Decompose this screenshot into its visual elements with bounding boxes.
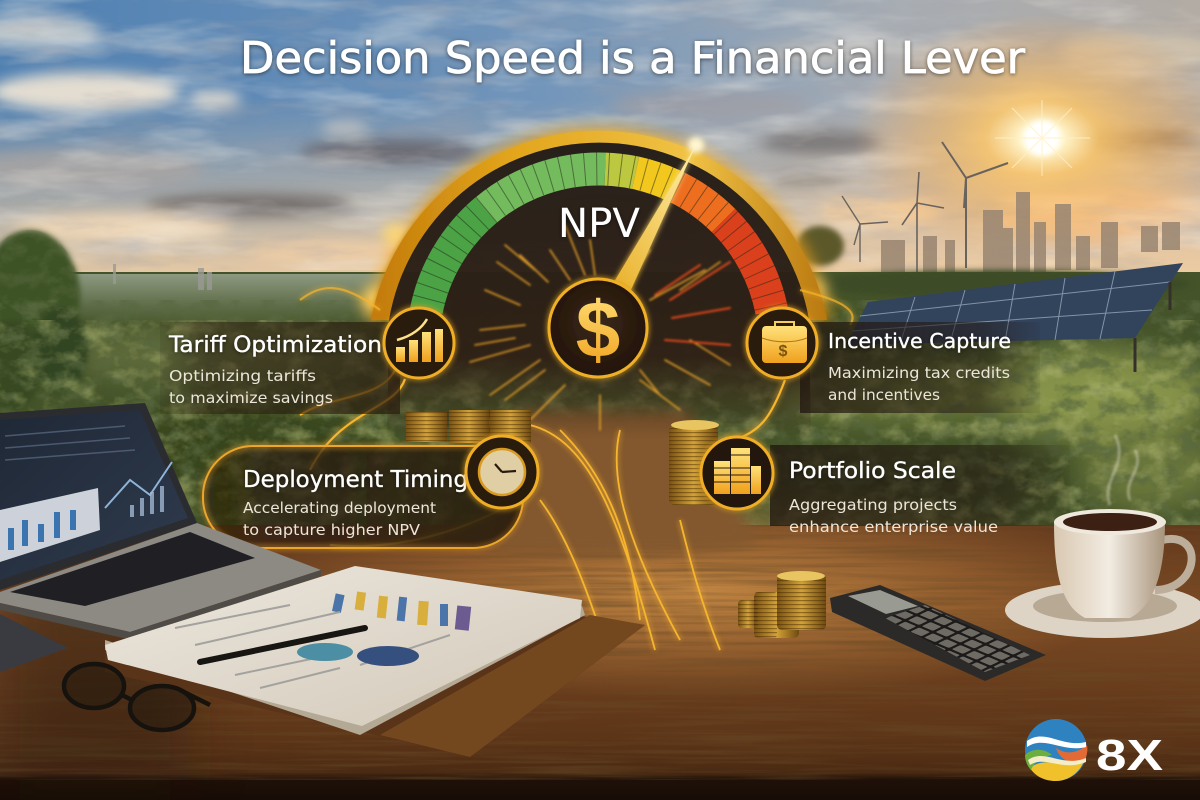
title: Decision Speed is a Financial Lever [240,33,1026,84]
gauge outer ring [371,131,827,320]
logo mark [1025,719,1087,781]
text: deployment description: Accelerating deployment [243,499,436,517]
heading: portfolio scale: Portfolio Scale [789,459,956,484]
road [470,410,760,555]
panel: incentive capture [747,308,1040,413]
NPV label: NPV [558,201,641,247]
panel: tariff optimization [160,308,454,414]
leather folder [105,585,645,757]
icon: briefcase: $ [779,343,788,360]
dial face [387,143,811,440]
heading: incentive capture: Incentive Capture [828,329,1011,353]
logo wordmark: 8X [1096,731,1163,780]
heading: tariff optimization: Tariff Optimization [168,333,382,358]
tablet [0,614,68,672]
wooden desk [0,480,1200,800]
text: portfolio description: Aggregating projects [789,496,957,514]
dollar hub [549,279,647,377]
pen [200,628,365,662]
coin stacks behind panels [406,410,719,505]
glowing flow lines [300,288,853,650]
dollar hub: $ [576,285,620,374]
icon: rising bars [384,308,454,378]
desk coins [738,571,826,638]
speed band [426,169,772,311]
text: tariff description line 2: to maximize savings [169,389,333,407]
laptop [0,403,321,640]
landscape hills and trees [0,226,1200,542]
radiating rays [470,225,730,430]
glasses [64,664,210,730]
icon: clock [466,436,538,508]
panel: deployment timing [203,436,538,548]
heading: deployment timing: Deployment Timing [243,467,468,493]
logo: 8X [1025,719,1163,781]
text: deployment description line 2: to capture higher NPV [243,521,420,539]
ring glow [361,131,827,320]
text: incentive description: Maximizing tax credits [828,364,1010,382]
solar panels [846,263,1183,372]
coffee cup and saucer [1005,435,1200,638]
report documents [105,566,585,735]
icon: buildings [701,437,773,509]
city skyline [881,192,1180,278]
text: incentive description line 2: and incentives [828,386,940,404]
text: portfolio description line 2: enhance enterprise value [789,518,998,536]
text: tariff description: Optimizing tariffs [169,367,316,385]
calculator [830,585,1046,681]
wind turbines [842,142,1008,272]
icon: briefcase [747,308,817,378]
needle [614,145,696,292]
needle tip flare [688,137,704,153]
panel: portfolio scale [701,437,1070,536]
NPV gauge [361,131,827,440]
sky background [0,0,1200,300]
